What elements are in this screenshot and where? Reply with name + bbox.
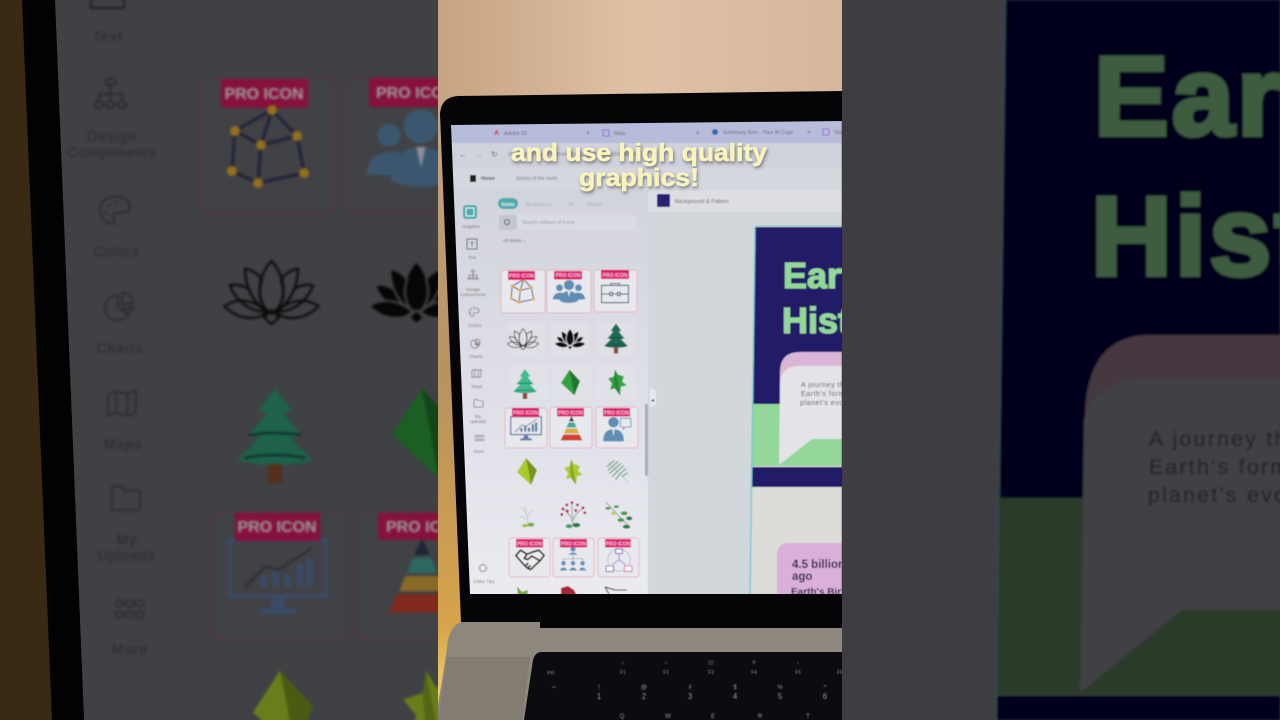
keyboard: 6 <box>823 692 828 701</box>
row 7 pro cards: PRO ICON <box>517 542 542 548</box>
address bar: → <box>475 150 483 159</box>
pro icon cards, row 4: PRO ICON <box>237 519 317 536</box>
poster title: Earth's <box>783 255 904 296</box>
center panel: laptop photo <box>438 0 842 720</box>
address bar <box>460 151 636 158</box>
timeline card: ago <box>792 571 812 583</box>
browser tab bar: Adobe ID <box>504 131 527 137</box>
pro icon cards, row 1: PRO ICON <box>376 85 455 102</box>
row 1 pro cards: PRO ICON <box>556 273 581 279</box>
asset panel controls: Search millions of icons <box>522 220 575 226</box>
row 4 pro cards <box>505 407 638 448</box>
asset panel controls: Icons <box>501 202 515 208</box>
browser tab bar: Nisa <box>614 131 626 137</box>
pro icon cards, row 4 <box>212 511 438 640</box>
row 7 pro cards <box>509 538 639 577</box>
caption <box>511 139 767 192</box>
laptop bezel <box>440 91 842 628</box>
right panel: zoomed dimmed poster <box>842 0 1280 720</box>
asset panel controls: 3D <box>568 202 575 208</box>
row 1 pro cards <box>501 270 637 313</box>
caption: graphics! <box>579 164 699 192</box>
scrollbar <box>645 404 648 476</box>
app header: history of the earth <box>516 176 558 182</box>
address bar: ← <box>459 150 467 159</box>
keyboard: ♁ <box>796 660 800 666</box>
lotus icons <box>224 261 464 324</box>
row 2 lotus and fir <box>506 323 628 354</box>
keyboard: % <box>777 685 783 691</box>
screen <box>451 121 842 594</box>
keyboard: ▯▯ <box>708 660 714 666</box>
address bar: ↻ <box>491 150 498 159</box>
sidebar labels: Text <box>93 28 123 44</box>
sidebar labels: My <box>117 531 137 547</box>
row 7 pro cards: PRO ICON <box>561 542 586 548</box>
sidebar labels: Uploads <box>98 547 156 563</box>
browser tab bar: × <box>807 130 811 136</box>
canvas area: ◂ <box>651 398 654 404</box>
intro card: Earth's formation <box>801 391 863 398</box>
sidebar: Charts <box>469 354 483 359</box>
sidebar <box>460 205 495 584</box>
row 7 pro cards: PRO ICON <box>606 542 631 548</box>
keyboard: 3 <box>688 692 693 701</box>
keyboard: ! <box>598 685 600 691</box>
timeline card: 4.5 billion <box>792 559 845 571</box>
timeline card: Earth's Birth <box>791 587 851 598</box>
asset panel controls: Photos <box>587 202 603 208</box>
keyboard: F1 <box>620 670 626 676</box>
sidebar labels: Colors <box>93 243 139 259</box>
intro card: A journey through <box>801 382 865 389</box>
keyboard: F5 <box>795 670 801 676</box>
sidebar labels: Charts <box>96 340 144 356</box>
keyboard: 5 <box>778 692 783 701</box>
keyboard <box>524 652 843 720</box>
keyboard: E <box>711 714 715 720</box>
keyboard: F3 <box>708 670 714 676</box>
keyboard: ~ <box>552 683 557 692</box>
sidebar: Graphics <box>462 224 481 229</box>
keyboard: esc <box>547 670 555 676</box>
keyboard: # <box>688 685 692 691</box>
keyboard: F4 <box>751 670 757 676</box>
sidebar: More <box>474 449 485 454</box>
row 4 pro cards: PRO ICON <box>513 410 538 416</box>
pro icon cards, row 1 <box>198 76 438 214</box>
keyboard: ☼ <box>621 660 625 666</box>
browser tab bar: × <box>586 131 590 137</box>
tree and leaf icons <box>237 388 458 483</box>
keyboard: T <box>806 714 810 720</box>
row 4 pro cards: PRO ICON <box>604 410 629 416</box>
row 3 tree and leaves <box>513 368 628 400</box>
intro card <box>1080 335 1280 693</box>
sidebar: My <box>475 414 482 419</box>
infographic poster <box>748 225 842 594</box>
app header: Home <box>481 176 495 182</box>
asset panel controls: All Styles ⌄ <box>503 238 527 243</box>
row 1 pro cards: PRO ICON <box>509 274 534 280</box>
keyboard: ⚲ <box>752 660 756 666</box>
keyboard: F6 <box>837 670 843 676</box>
laptop base <box>438 622 842 720</box>
row 8 cut-off icons <box>516 586 628 594</box>
sidebar labels: Maps <box>104 436 142 452</box>
canvas area: Background & Pattern <box>675 199 729 205</box>
asset panel controls: Illustrations <box>526 202 552 208</box>
keyboard: 2 <box>642 692 647 701</box>
keyboard: @ <box>641 685 647 691</box>
title <box>1091 34 1280 299</box>
browser tab bar: × <box>696 131 700 137</box>
caption: and use high quality <box>511 139 767 167</box>
sidebar: Uploads <box>470 419 487 424</box>
intro card: planet's evolution <box>800 400 864 407</box>
browser tab bar <box>440 120 842 143</box>
row 6 botanical sprigs <box>520 501 632 529</box>
sidebar: Colors <box>468 323 482 328</box>
sidebar: Components <box>460 292 487 297</box>
lime leaf icons <box>252 670 438 720</box>
left panel: zoomed dimmed screen <box>0 0 485 720</box>
canvas area <box>648 190 842 597</box>
row 1 pro cards: PRO ICON <box>603 273 628 279</box>
sidebar: Maps <box>471 384 483 389</box>
poster title: History <box>782 300 906 341</box>
keyboard: ☼ <box>664 660 668 666</box>
keyboard: F2 <box>663 670 669 676</box>
keyboard: 4 <box>733 692 738 701</box>
sidebar icons <box>91 0 143 618</box>
row 5 lime leaves and palm <box>517 458 629 485</box>
keyboard: ^ <box>824 685 827 691</box>
address bar: designs.mybrandnewlogo.com/app/3/edit/6/app# <box>508 152 638 158</box>
pro icon cards, row 1: PRO ICON <box>224 86 304 103</box>
timeline card <box>776 542 842 594</box>
row 4 pro cards: PRO ICON <box>558 410 583 416</box>
sidebar: Editor Tips <box>473 579 495 584</box>
left wall strip <box>438 164 462 704</box>
keyboard: R <box>758 714 763 720</box>
pro icon cards, row 4: PRO ICON <box>386 519 465 536</box>
sidebar labels: Components <box>67 144 157 160</box>
sidebar: T <box>470 242 475 249</box>
sidebar labels: Design <box>87 128 137 144</box>
browser tab bar: Nis <box>834 130 842 136</box>
keyboard: $ <box>733 685 737 691</box>
browser tab bar: A <box>494 130 499 137</box>
browser tab bar: Summary Box - Your AI Copi <box>723 130 793 136</box>
keyboard: Q <box>620 714 625 720</box>
keyboard: W <box>665 714 671 720</box>
asset panel controls <box>498 198 602 244</box>
sidebar labels: More <box>112 641 148 657</box>
keyboard: 1 <box>597 692 602 701</box>
icon grid <box>501 270 639 596</box>
sidebar labels <box>67 28 157 657</box>
intro card <box>778 351 842 465</box>
sidebar: Design <box>466 287 480 292</box>
sidebar: Text <box>468 255 477 260</box>
app header <box>470 174 558 182</box>
poster title <box>782 262 842 335</box>
